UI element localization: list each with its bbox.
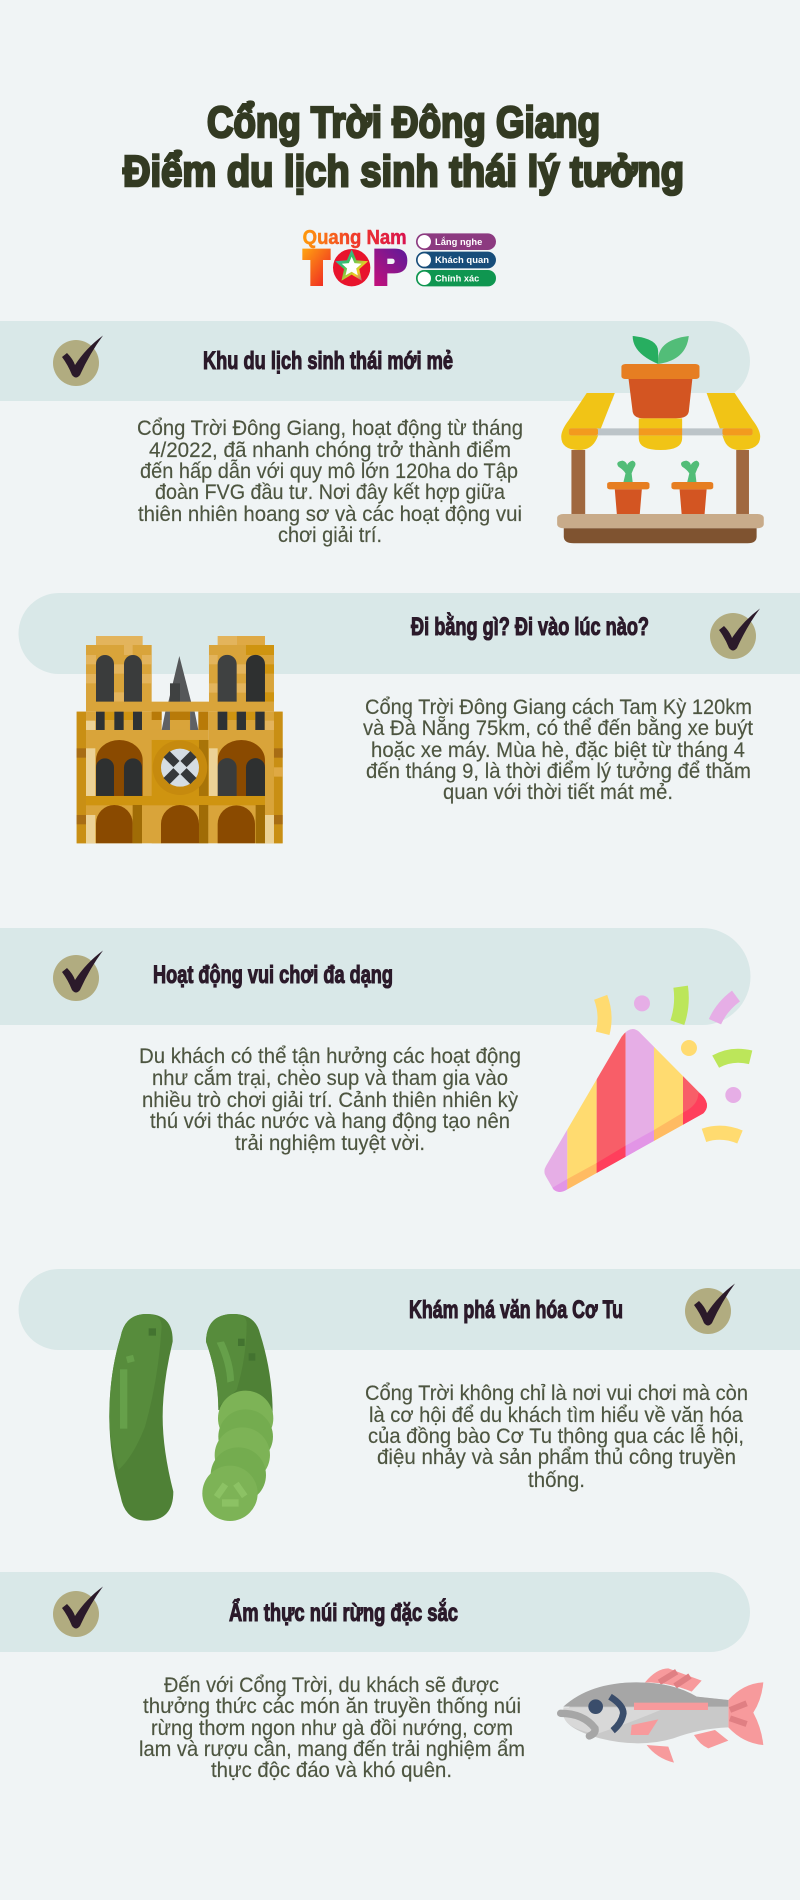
text block 4 [365,1382,748,1492]
icon: check mark 1 [53,336,103,386]
text block 4: của đồng bào Cơ Tu thông qua các lễ hội, [368,1425,744,1448]
title [123,98,684,196]
text block 5: thưởng thức các món ăn truyền thống núi [143,1695,521,1718]
text block 3: như cắm trại, chèo sup và tham gia vào [152,1067,508,1090]
heading 2: Đi bằng gì? Đi vào lúc nào? [411,611,649,641]
text block 4: là cơ hội để du khách tìm hiểu về văn hóa [369,1404,743,1427]
text block 4: Cổng Trời không chỉ là nơi vui chơi mà còn [365,1382,748,1405]
text block 1: đến hấp dẫn với quy mô lớn 120ha do Tập [140,460,518,483]
icon: check mark 3 [53,950,103,1001]
logo: Quang Nam TOP: Khách quan [435,255,489,265]
text block 4: điệu nhảy và sản phẩm thủ công truyền [377,1446,736,1469]
text block 5: Đến với Cổng Trời, du khách sẽ được [164,1674,499,1697]
panel: section 1, new eco-tourism area [0,321,764,547]
logo: Quang Nam TOP: Quang Nam [303,227,407,249]
text block 2: đến tháng 9, là thời điểm lý tưởng để thăm [366,760,751,783]
icon: cathedral [77,636,283,843]
icon: check mark 5 [53,1586,103,1637]
text block 2: và Đà Nẵng 75km, có thể đến bằng xe buýt [363,717,753,740]
logo: Quang Nam TOP: Chính xác [435,273,479,283]
icon: party popper with confetti [540,987,751,1200]
text block 2: Cổng Trời Đông Giang cách Tam Kỳ 120km [365,696,752,719]
text block 1: thiên nhiên hoang sơ và các hoạt động vui [138,503,522,526]
text block 4: thống. [528,1469,585,1492]
text block 1: chơi giải trí. [278,524,382,547]
heading 5: Ẩm thực núi rừng đặc sắc [229,1597,458,1627]
text block 5 [139,1674,525,1782]
panel: section 3, varied activities [0,928,751,1200]
icon: fish [561,1668,763,1763]
text block 5: lam và rượu cần, mang đến trải nghiệm ẩm [139,1738,525,1761]
icon: cucumbers [109,1314,273,1521]
text block 3: nhiều trò chơi giải trí. Cảnh thiên nhiên kỳ [142,1089,518,1112]
panel: section 5, mountain cuisine [0,1572,763,1782]
heading 1: Khu du lịch sinh thái mới mẻ [203,347,453,375]
text block 3: thú với thác nước và hang động tạo nên [150,1110,510,1133]
logo: Quang Nam TOP [302,227,496,286]
heading 4: Khám phá văn hóa Cơ Tu [409,1296,623,1324]
text block 3: Du khách có thể tận hưởng các hoạt động [139,1045,521,1068]
heading 3: Hoạt động vui chơi đa dạng [153,961,393,989]
text block 2: quan với thời tiết mát mẻ. [443,781,673,804]
text block 5: thực độc đáo và khó quên. [211,1759,452,1782]
icon: market stall with plant pots [557,336,764,543]
logo: Quang Nam TOP: Lắng nghe [435,236,482,247]
title: Điểm du lịch sinh thái lý tưởng [123,147,684,196]
text block 1 [137,417,523,547]
icon: check mark 2 [710,608,760,659]
text block 1: Cổng Trời Đông Giang, hoạt động từ tháng [137,417,523,440]
title: Cổng Trời Đông Giang [207,98,600,147]
icon: check mark 4 [685,1284,735,1334]
panel: section 4, Co Tu culture [19,1269,800,1521]
panel: section 2, how and when to go [18,593,800,843]
text block 1: 4/2022, đã nhanh chóng trở thành điểm [149,439,511,462]
text block 5: rừng thơm ngon như gà đồi nướng, cơm [151,1717,513,1740]
text block 3: trải nghiệm tuyệt vời. [235,1132,425,1155]
text block 2 [363,696,753,804]
text block 1: đoàn FVG đầu tư. Nơi đây kết hợp giữa [155,481,505,504]
text block 2: hoặc xe máy. Mùa hè, đặc biệt từ tháng 4 [371,739,745,762]
text block 3 [139,1045,521,1155]
